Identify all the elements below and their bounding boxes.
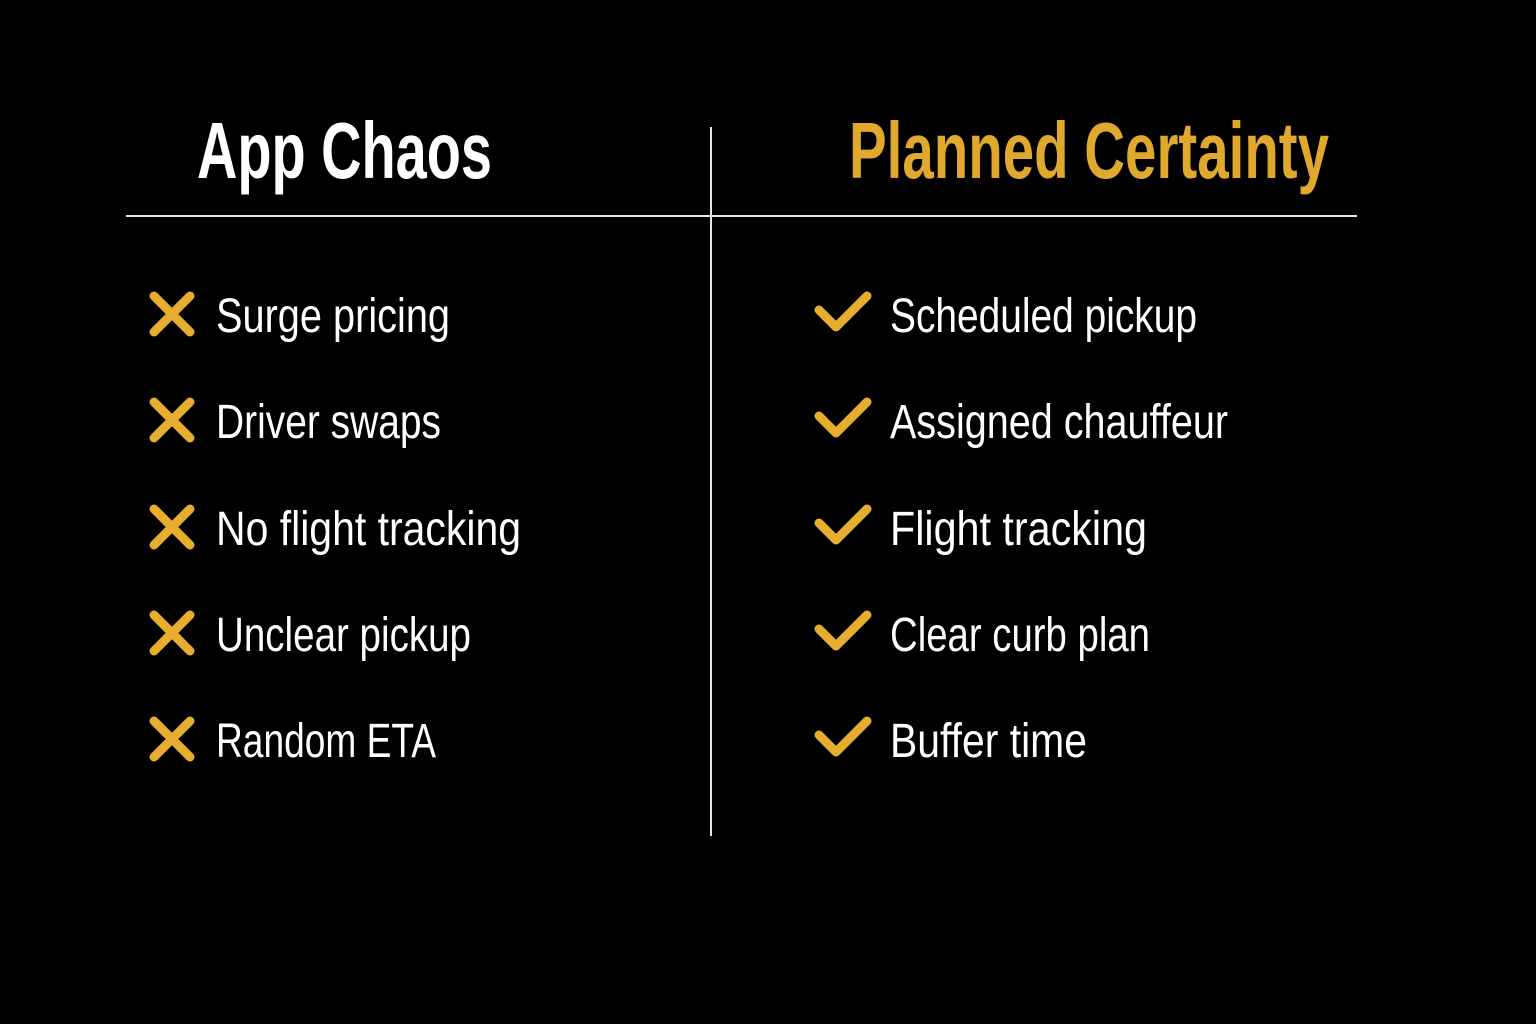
item: Scheduled pickup: Scheduled pickup [890,290,1197,343]
item: Scheduled pickup [819,290,1197,343]
title: App Chaos: App Chaos [197,106,492,195]
item: Surge pricing [154,290,450,343]
item: No flight tracking: No flight tracking [216,503,521,556]
item: Flight tracking: Flight tracking [890,503,1147,556]
item: Clear curb plan: Clear curb plan [890,609,1150,662]
panel: planned certainty list [819,290,1228,768]
item: Random ETA [154,715,436,768]
item: Buffer time: Buffer time [890,715,1087,768]
item: Random ETA: Random ETA [216,715,436,768]
item: Driver swaps [154,396,441,449]
item: Unclear pickup [154,609,471,662]
item: Driver swaps: Driver swaps [216,396,441,449]
title: Planned Certainty: Planned Certainty [849,106,1329,195]
item: Assigned chauffeur: Assigned chauffeur [890,396,1228,449]
item: Buffer time [819,715,1087,768]
item: Clear curb plan [819,609,1150,662]
item: Surge pricing: Surge pricing [216,290,450,343]
panel: app chaos list [154,290,521,768]
item: Flight tracking [819,503,1147,556]
item: Unclear pickup: Unclear pickup [216,609,471,662]
